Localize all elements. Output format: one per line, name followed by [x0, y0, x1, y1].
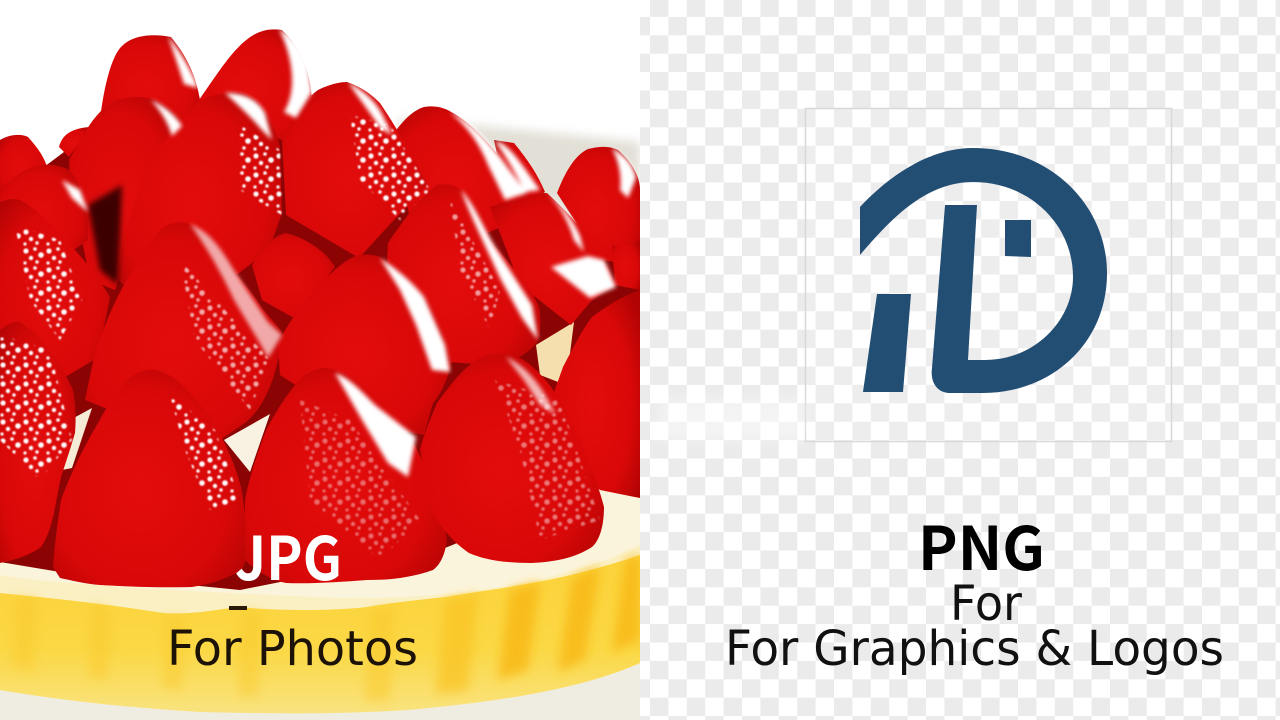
tart filling: [0, 480, 640, 610]
heading: JPG: JPG: [235, 511, 342, 598]
strawberries: [0, 29, 640, 587]
dash under JPG: [229, 606, 247, 610]
caption: For: For: [950, 576, 1022, 632]
speckled seed highlights: [0, 115, 600, 560]
cream gap left: [62, 408, 92, 470]
faint watermark glow: [660, 400, 805, 440]
cream gap between berries: [224, 414, 270, 472]
caption: For Photos: For Photos: [167, 621, 418, 677]
heading: PNG: PNG: [918, 501, 1045, 588]
caption: For Graphics and Logos: For Graphics & Logos: [725, 621, 1224, 677]
panel: JPG photo of strawberry tart: [0, 0, 640, 720]
cream gap right: [536, 322, 574, 385]
gloss highlights: [62, 29, 636, 477]
icon: iD logo: [860, 148, 1107, 393]
logo frame: [806, 108, 1172, 442]
panel: PNG transparency checkerboard: [640, 0, 1280, 720]
tart crust: [0, 545, 640, 713]
dark crevice behind berries: [88, 185, 122, 285]
